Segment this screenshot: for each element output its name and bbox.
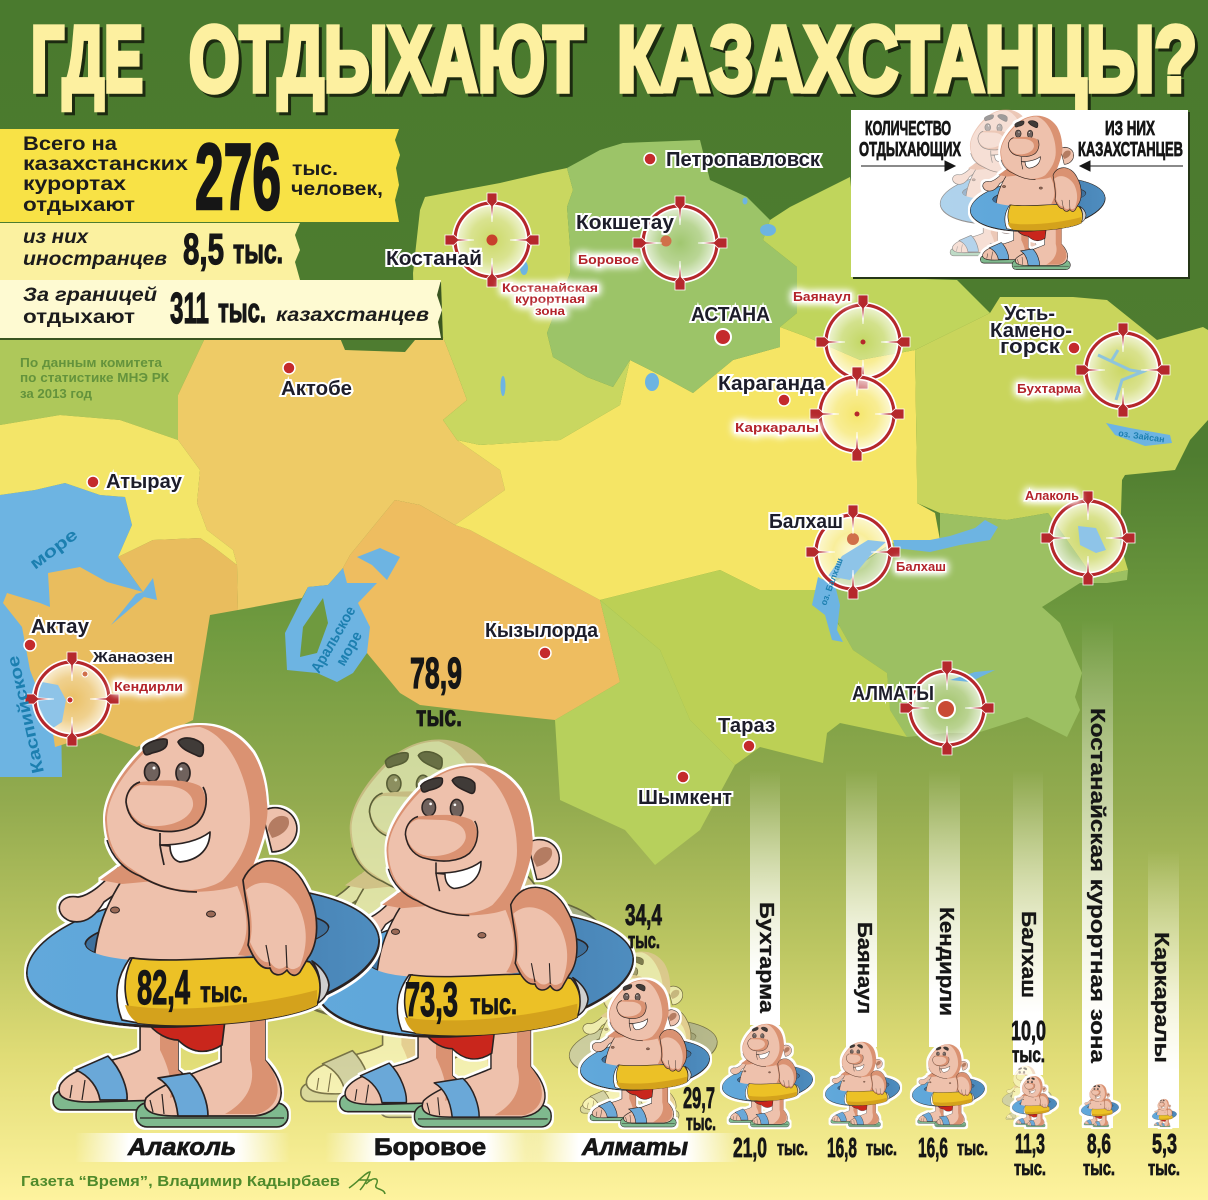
bar: Kostanay zone: Костанайская курортная зона (1086, 708, 1108, 1064)
city: Атырау: Атырау (106, 471, 183, 493)
bar: Balkhash (1013, 770, 1043, 1075)
region: Aktobe (178, 337, 505, 610)
city: Астана: АСТАНА (691, 304, 770, 326)
legend left arrow (861, 161, 955, 171)
panel: foreigners: из них (23, 227, 90, 248)
lake: Zaysan (1106, 423, 1172, 446)
region: Atyrau (0, 415, 237, 565)
value: Borovoe: 73,3 (405, 974, 458, 1027)
map of Kazakhstan (0, 140, 1208, 865)
lake: Aral sea (285, 548, 400, 682)
figure: Almaty (578, 979, 712, 1127)
legend right arrow (1080, 161, 1183, 171)
region: Kostanay (413, 168, 630, 445)
figure: Kendirli (911, 1044, 986, 1127)
value: Balkhash: 11,3 (1015, 1128, 1045, 1159)
marker: Kostanay zone (445, 193, 598, 318)
figure: Almaty ghost (566, 952, 720, 1120)
value: Bukhtarma: 21,0 (733, 1132, 767, 1163)
rotated bars (750, 620, 1179, 1128)
panel: total resort visitors: Всего на (23, 134, 117, 155)
figure: Alakol (20, 725, 386, 1127)
legend main figure (968, 116, 1108, 270)
value: Almaty total: тыс. (628, 928, 660, 953)
region: Caspian sea (0, 483, 143, 777)
city: Кызылорда (485, 620, 599, 659)
marker: Kendirli: Кендирли (114, 679, 183, 694)
city: Усть-Каменогорск: Камено- (990, 320, 1072, 342)
value: Borovoe: тыс. (470, 988, 517, 1021)
city: Кызылорда: Кызылорда (485, 620, 599, 642)
lake: Zaysan: оз. Зайсан (1118, 428, 1165, 444)
marker: Bayanaul: Баянаул (793, 289, 851, 304)
name: Alakol: Алаколь (127, 1134, 236, 1161)
city: Балхаш: Балхаш (769, 511, 843, 533)
region: Almaty (823, 513, 1128, 737)
value: Bayanaul: тыс. (866, 1138, 897, 1160)
panel: abroad: отдыхают (23, 307, 135, 328)
panel: abroad: казахстанцев (276, 305, 429, 326)
name: Borovoe: Боровое (374, 1134, 486, 1161)
bar: Kostanay zone (1082, 620, 1113, 1128)
source note: за 2013 год (20, 386, 93, 401)
bar: Karkaraly (1148, 850, 1179, 1128)
city: Петропавловск: Петропавловск (666, 149, 821, 171)
title: ОТДЫХАЮТ (189, 7, 583, 111)
panel: total resort visitors: 276 (195, 124, 281, 229)
panel: foreigners: 8,5 (183, 225, 224, 274)
name: Almaty: Алматы (581, 1134, 689, 1161)
bar: Kendirli: Кендирли (935, 907, 957, 1016)
marker: Alakol: Алаколь (1025, 488, 1079, 503)
marker: Bukhtarma (1017, 323, 1170, 417)
city: Шымкент (638, 771, 732, 809)
marker: Bukhtarma: Бухтарма (1017, 381, 1082, 396)
credit (21, 1172, 385, 1194)
marker: Kostanay zone: зона (535, 304, 565, 318)
city: Усть-Каменогорск (990, 303, 1080, 358)
value: Kendirli: 16,6 (918, 1132, 948, 1163)
value: Almaty (683, 1082, 716, 1135)
panel: total resort visitors (0, 124, 400, 229)
marker: Balkhash (806, 505, 946, 607)
lakes of the north (500, 198, 776, 396)
region: Akmola and North Kazakhstan (547, 140, 797, 393)
city: Караганда: Караганда (718, 373, 826, 395)
bar: Bayanaul: Баянаул (853, 922, 875, 1014)
marker: Borovoe (578, 196, 727, 290)
title: ГДЕ (31, 7, 143, 111)
value: Almaty total (625, 899, 662, 953)
figure: Bukhtarma (720, 1024, 815, 1127)
name bands (75, 1133, 740, 1162)
city: Усть-Каменогорск: горск (1000, 336, 1061, 358)
region: Pavlodar (763, 177, 990, 360)
value: Bayanaul: 16,8 (827, 1132, 857, 1163)
value: Bukhtarma: тыс. (777, 1138, 808, 1160)
city: Актобе: Актобе (281, 378, 352, 400)
value: Kostanay zone: 8,6 (1087, 1128, 1111, 1159)
marker: Alakol (1025, 488, 1135, 585)
city: Костанай: Костанай (386, 248, 482, 270)
marker: Borovoe: Боровое (578, 252, 639, 267)
lake: Aral sea: Аральское (308, 603, 359, 676)
value: Borovoe total: тыс. (416, 700, 462, 733)
value: Balkhash: тыс. (1014, 1158, 1046, 1180)
value: Almaty: тыс. (686, 1110, 716, 1135)
source note: по статистике МНЭ РК (20, 370, 169, 385)
bar: Kendirli (929, 770, 960, 1047)
value: Karkaraly: тыс. (1148, 1158, 1180, 1180)
value: Kendirli: тыс. (957, 1138, 988, 1160)
panel: total resort visitors: тыс. (292, 159, 338, 180)
city: Шымкент: Шымкент (638, 787, 732, 809)
panel: total resort visitors: казахстанских (23, 154, 189, 175)
region: West Kazakhstan (0, 338, 205, 440)
title (31, 7, 1197, 111)
value: Balkhash (1014, 1128, 1046, 1180)
marker: Balkhash: Балхаш (896, 559, 946, 574)
region: Zhambyl (600, 570, 907, 765)
value: Kostanay zone: тыс. (1083, 1158, 1115, 1180)
legend left text (859, 118, 961, 161)
marker: Karkaraly (735, 367, 904, 461)
lake: Balkhash (812, 520, 998, 642)
panel: abroad: За границей (23, 285, 157, 306)
legend ghost figure (938, 110, 1077, 262)
figure: Balkhash ghost (1001, 1066, 1052, 1122)
panel: abroad (0, 280, 443, 340)
value: Almaty total: 34,4 (625, 899, 662, 932)
signature (349, 1172, 385, 1194)
panel: foreigners (0, 223, 300, 280)
region: Karaganda (455, 327, 940, 600)
bar: Bukhtarma (750, 770, 780, 1025)
bar: Karkaraly: Каркаралы (1150, 932, 1172, 1063)
value: Karkaraly (1148, 1128, 1180, 1180)
credit: Газета “Время”, Владимир Кадырбаев (21, 1173, 340, 1190)
city: Усть-Каменогорск: Усть- (1004, 303, 1055, 325)
bar: Bukhtarma: Бухтарма (755, 902, 777, 1014)
source note (20, 355, 169, 401)
value: Karkaraly: 5,3 (1152, 1128, 1177, 1159)
figure: Balkhash (1011, 1076, 1058, 1127)
panel: foreigners: иностранцев (23, 249, 167, 270)
marker: Kendirli: Жанаозен (92, 649, 173, 666)
marker: Karkaraly: Каркаралы (735, 420, 819, 435)
value: Kostanay zone (1083, 1128, 1115, 1180)
marker: Kendirli (25, 649, 183, 746)
value: Borovoe total (410, 649, 462, 733)
figure: Borovoe (310, 765, 640, 1127)
marker: Almaty (900, 661, 995, 755)
figure: Kostanay zone (1080, 1084, 1120, 1127)
figure: Borovoe ghost (270, 740, 614, 1117)
city: Караганда (718, 373, 826, 406)
label: Caspian: Каспийское (3, 654, 48, 775)
region: South Kazakhstan (555, 600, 735, 865)
city: Актау (24, 616, 90, 651)
marker: Kostanay zone: курортная (515, 292, 585, 306)
marker: Kostanay zone: Костанайская (502, 281, 598, 295)
region: Kyzylorda (343, 500, 620, 720)
region: Mangystau (3, 538, 238, 747)
bay (111, 578, 157, 625)
legend right text (1078, 118, 1183, 161)
city: Тараз: Тараз (718, 715, 775, 737)
city: Актау: Актау (31, 616, 90, 638)
value: Borovoe total: 78,9 (410, 649, 462, 698)
legend right text: ИЗ НИХ (1105, 118, 1155, 140)
value: Alakol: 82,4 (137, 962, 190, 1015)
marker: Bayanaul (793, 289, 910, 389)
value: Almaty: 29,7 (683, 1082, 715, 1115)
city: Кокшетау: Кокшетау (576, 212, 675, 234)
bar: Bayanaul (846, 770, 877, 1047)
marker: Balkhash: оз. Балхаш (818, 557, 845, 607)
legend box (851, 110, 1190, 279)
city: Актобе (281, 362, 352, 400)
source note: По данным комитета (20, 355, 163, 370)
panel: total resort visitors: курортах (23, 174, 127, 195)
city: Астана (691, 304, 770, 345)
bar: Balkhash: Балхаш (1017, 911, 1039, 998)
value: Balkhash total: тыс. (1012, 1044, 1045, 1067)
value: Balkhash total (1011, 1015, 1046, 1067)
city: Алматы: АЛМАТЫ (852, 683, 934, 705)
panel: total resort visitors: человек, (291, 179, 383, 200)
legend left text: ОТДЫХАЮЩИХ (859, 139, 961, 161)
label: sea: море (26, 525, 81, 573)
legend left text: КОЛИЧЕСТВО (865, 118, 951, 140)
figure: Bayanaul (824, 1042, 901, 1127)
lake: Aral sea: море (333, 628, 366, 669)
region: East Kazakhstan (915, 297, 1208, 577)
panel: foreigners: тыс. (233, 233, 283, 271)
figure: Karkaraly (1152, 1099, 1177, 1127)
city: Тараз (718, 715, 775, 752)
value: Balkhash total: 10,0 (1011, 1015, 1046, 1046)
panel: total resort visitors: отдыхают (23, 195, 135, 216)
value: Alakol: тыс. (200, 976, 248, 1009)
panel: abroad: тыс. (218, 292, 266, 330)
panel: abroad: 311 (170, 284, 209, 333)
